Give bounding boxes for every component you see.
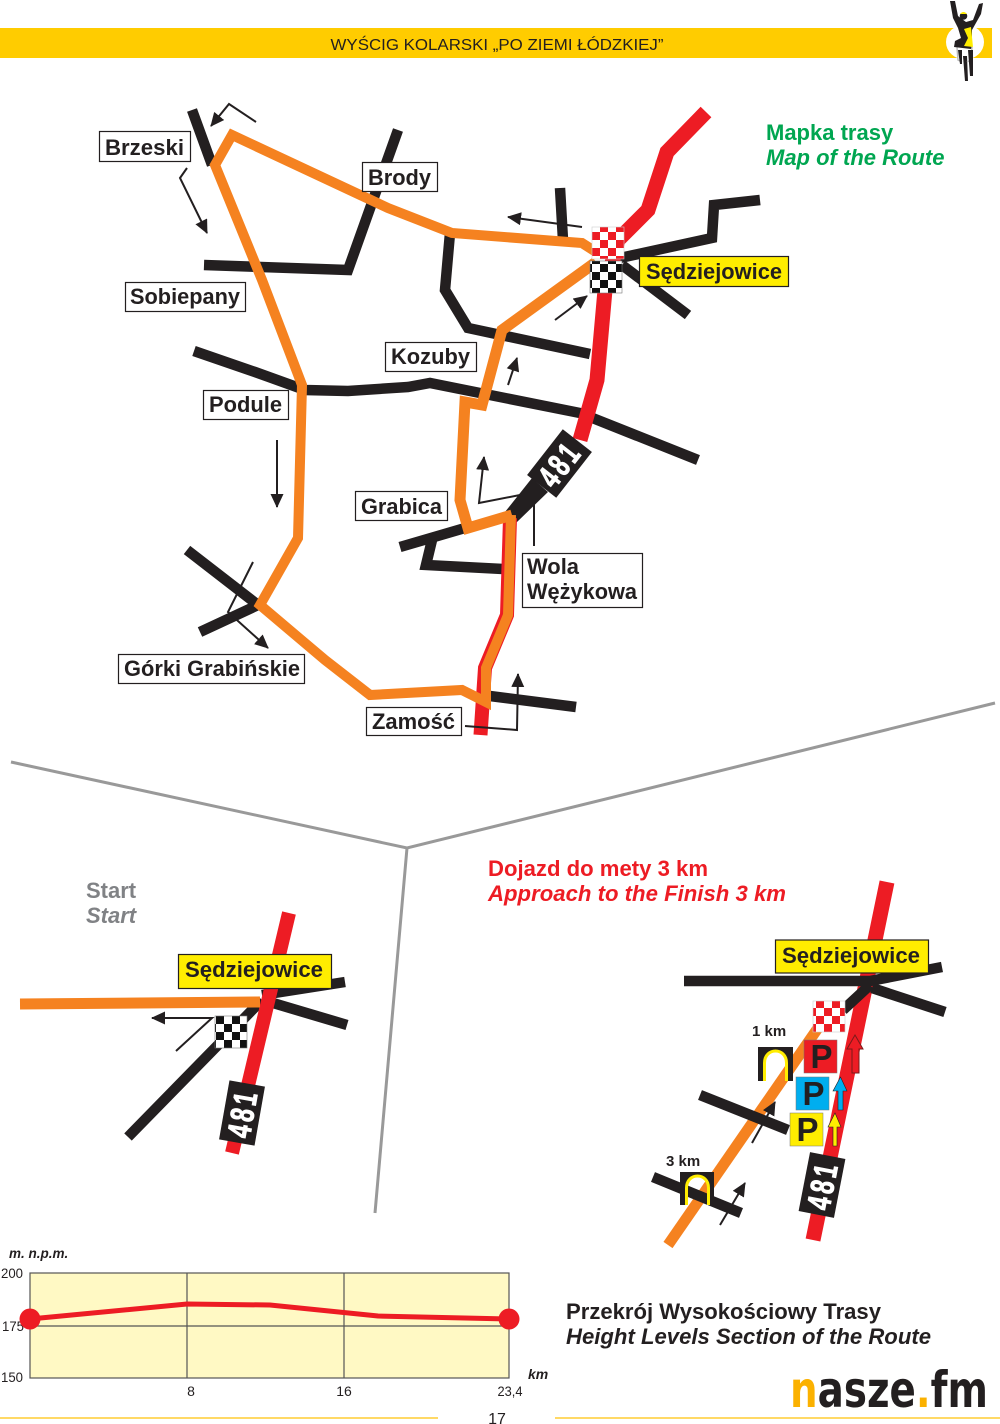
heading: height levels xyxy=(566,1299,931,1349)
label: Brzeski: Brzeski xyxy=(105,135,184,160)
unit label: m. n.p.m. xyxy=(9,1246,68,1261)
heading: map of the route: Map of the Route xyxy=(766,145,944,170)
heading: approach to the finish xyxy=(487,856,786,906)
start dot xyxy=(20,1308,40,1330)
label: Sędziejowice: Sędziejowice xyxy=(185,957,323,982)
orange route xyxy=(20,1002,260,1004)
axis labels: 16 xyxy=(336,1383,352,1399)
header title: WYŚCIG KOLARSKI „PO ZIEMI ŁÓDZKIEJ” xyxy=(330,36,664,54)
marker: 1 km arch xyxy=(752,1023,793,1081)
route map xyxy=(100,104,788,736)
orange route xyxy=(215,135,596,702)
finish flag xyxy=(813,1001,845,1032)
sign: road 481 xyxy=(219,1080,266,1146)
plot area xyxy=(30,1273,509,1378)
label: Wola Wężykowa xyxy=(522,554,642,608)
heading: map of the route xyxy=(766,120,944,170)
marker: 1 km arch: 1 km xyxy=(752,1023,786,1040)
axis labels: 23,4 xyxy=(498,1383,523,1399)
sign: road 481: 481 xyxy=(220,1086,265,1140)
label: Górki Grabińskie: Górki Grabińskie xyxy=(124,656,300,681)
label: Podule: Podule xyxy=(209,392,282,417)
arrow blue xyxy=(833,1077,847,1110)
parking yellow xyxy=(790,1111,823,1148)
parking blue xyxy=(796,1075,829,1112)
start map xyxy=(20,913,347,1153)
marker: 3 km arch xyxy=(666,1153,714,1205)
parking blue: P xyxy=(802,1075,825,1112)
axis labels: 150 xyxy=(1,1369,23,1385)
arrow xyxy=(152,1018,212,1051)
label: Grabica: Grabica xyxy=(361,494,443,519)
label: Wola Wężykowa: Wola xyxy=(527,554,580,579)
red road xyxy=(232,913,289,1153)
black roads xyxy=(653,967,945,1213)
section dividers xyxy=(11,703,995,1213)
finish flag xyxy=(592,227,624,259)
heading: approach to the finish: Approach to the Finish 3 km xyxy=(487,881,786,906)
arrow yellow xyxy=(828,1113,841,1146)
label: Sędziejowice xyxy=(178,954,332,988)
label: Kozuby: Kozuby xyxy=(391,344,471,369)
sign: road 481: 481 xyxy=(531,434,589,494)
elevation chart xyxy=(1,1246,548,1399)
sign: road 481: 481 xyxy=(800,1158,845,1213)
sign: road 481 xyxy=(799,1152,846,1218)
axis labels: 200 xyxy=(1,1265,23,1281)
label: Brody: Brody xyxy=(368,165,432,190)
heading: height levels: Przekrój Wysokościowy Trasy xyxy=(566,1299,882,1324)
end dot xyxy=(498,1308,520,1330)
icon: cyclist logo xyxy=(946,1,984,81)
arrows xyxy=(752,1102,775,1143)
orange route xyxy=(668,1028,818,1245)
header bar xyxy=(0,28,992,58)
label: Sędziejowice: Sędziejowice xyxy=(646,259,782,284)
label: Sędziejowice xyxy=(776,940,928,973)
arrow red xyxy=(847,1035,863,1073)
black side roads xyxy=(187,110,760,707)
direction arrows xyxy=(180,104,587,730)
axis labels: 8 xyxy=(187,1383,195,1399)
logo: nasze.fm: nasze.fm xyxy=(790,1361,988,1419)
heading: start: Start xyxy=(86,903,138,928)
axis labels xyxy=(1,1265,548,1399)
start flag xyxy=(590,261,622,293)
label: Wola Wężykowa: Wężykowa xyxy=(527,579,638,604)
heading: map of the route: Mapka trasy xyxy=(766,120,894,145)
label: Sobiepany: Sobiepany xyxy=(130,284,241,309)
sign: road 481 xyxy=(527,429,592,498)
finish map xyxy=(653,882,945,1245)
black roads xyxy=(128,982,347,1137)
heading: height levels: Height Levels Section of the Route xyxy=(566,1324,931,1349)
label: Zamość: Zamość xyxy=(372,709,455,734)
axis labels: km xyxy=(528,1366,548,1382)
red main road 481 xyxy=(580,112,706,440)
label: Sędziejowice: Sędziejowice xyxy=(782,943,920,968)
axis labels: 175 xyxy=(2,1318,24,1334)
parking red xyxy=(804,1038,837,1075)
parking yellow: P xyxy=(796,1111,819,1148)
heading: start: Start xyxy=(86,878,137,903)
elevation line xyxy=(30,1304,509,1319)
marker: 3 km arch: 3 km xyxy=(666,1153,700,1170)
heading: start xyxy=(86,878,138,928)
heading: approach to the finish: Dojazd do mety 3 km xyxy=(488,856,708,881)
red road xyxy=(813,882,887,1240)
start flag xyxy=(215,1016,247,1048)
labels: towns xyxy=(100,132,788,736)
parking red: P xyxy=(810,1038,833,1075)
